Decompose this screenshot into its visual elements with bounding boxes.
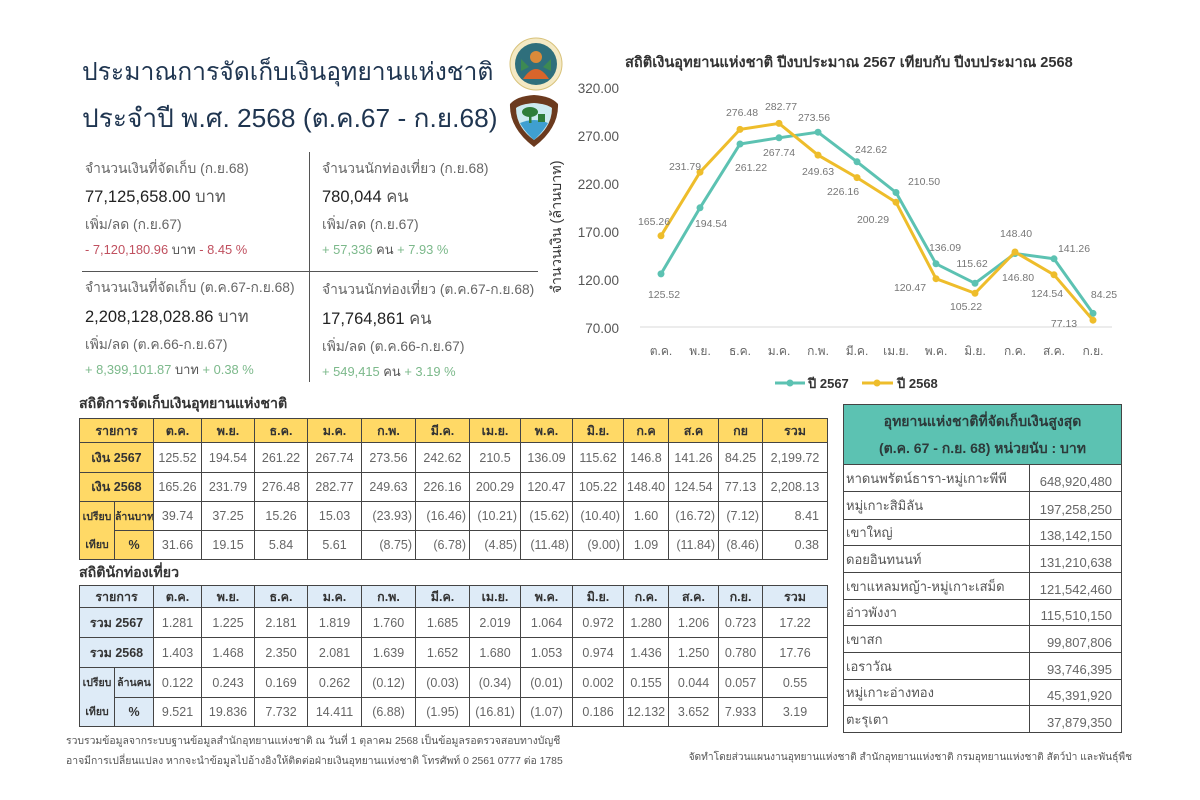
panel: monthly revenue summary bbox=[85, 159, 249, 257]
data labels: 194.54 bbox=[695, 218, 727, 230]
table: visitor statistics: 0.55 bbox=[783, 676, 807, 690]
data labels: 148.40 bbox=[1000, 228, 1032, 240]
data labels: 249.63 bbox=[802, 166, 834, 178]
table: visitor statistics: 2.181 bbox=[265, 616, 297, 630]
table: revenue statistics: (4.85) bbox=[484, 538, 517, 552]
table: visitor statistics: 0.243 bbox=[212, 676, 244, 690]
table: visitor statistics: 1.281 bbox=[162, 616, 193, 630]
table: revenue statistics: 124.54 bbox=[674, 480, 713, 494]
data labels: 146.80 bbox=[1002, 272, 1034, 284]
table: visitor statistics: 1.064 bbox=[531, 616, 562, 630]
icon: park shield bbox=[510, 95, 558, 147]
table: revenue statistics: ล้านบาท bbox=[115, 510, 154, 522]
table: visitor statistics: เปรียบ bbox=[83, 677, 111, 689]
divider: summary horizontal bbox=[82, 271, 538, 272]
table: revenue statistics: 200.29 bbox=[476, 480, 514, 494]
table: revenue statistics: (11.48) bbox=[530, 538, 569, 552]
table: revenue statistics: มี.ค. bbox=[431, 424, 454, 438]
table: visitor statistics: 7.933 bbox=[725, 705, 756, 719]
table: visitor statistics: 1.639 bbox=[373, 646, 404, 660]
y axis labels: 170.00 bbox=[578, 225, 619, 240]
x axis labels bbox=[650, 344, 1103, 358]
x axis labels: ส.ค. bbox=[1043, 344, 1065, 358]
table: top revenue parks: เอราวัณ bbox=[846, 658, 892, 674]
panel: yearly revenue summary: + 8,399,101.87 บาท + 0.38 % bbox=[85, 362, 254, 377]
table: top revenue parks: 45,391,920 bbox=[1047, 688, 1112, 703]
table: visitor statistics: 2.081 bbox=[319, 646, 350, 660]
table: visitor statistics bbox=[79, 585, 828, 727]
panel: yearly visitors summary bbox=[322, 280, 534, 379]
table: revenue statistics: เทียบ bbox=[85, 539, 109, 551]
table: visitor statistics: เทียบ bbox=[85, 706, 109, 718]
table: revenue statistics: 282.77 bbox=[315, 480, 354, 494]
table: revenue statistics: 273.56 bbox=[369, 450, 408, 464]
table: top revenue parks: 138,142,150 bbox=[1040, 528, 1112, 543]
data labels: 115.62 bbox=[956, 258, 988, 270]
table: top revenue parks bbox=[843, 404, 1122, 733]
panel: monthly revenue summary: - 7,120,180.96 บาท - 8.45 % bbox=[85, 242, 247, 257]
table: revenue statistics: 1.09 bbox=[634, 538, 658, 552]
panel: yearly visitors summary: จำนวนนักท่องเที่ยว (ต.ค.67-ก.ย.68) bbox=[322, 282, 534, 297]
table: visitor statistics: 0.169 bbox=[265, 676, 297, 690]
table: visitor statistics: 0.780 bbox=[725, 646, 756, 660]
data labels: 276.48 bbox=[726, 107, 758, 119]
table: revenue statistics: กย bbox=[733, 424, 748, 438]
table: visitor statistics: 2.019 bbox=[479, 616, 511, 630]
table: visitor statistics: (1.07) bbox=[530, 705, 563, 719]
table: visitor statistics: 0.974 bbox=[582, 646, 614, 660]
table: visitor statistics: ก.ค. bbox=[635, 590, 657, 604]
panel: yearly revenue summary: จำนวนเงินที่จัดเก็บ (ต.ค.67-ก.ย.68) bbox=[85, 280, 295, 295]
table: revenue statistics: % bbox=[128, 538, 140, 552]
panel: yearly revenue summary: เพิ่ม/ลด (ต.ค.66-ก.ย.67) bbox=[85, 337, 227, 352]
table: revenue statistics: 15.26 bbox=[265, 509, 297, 523]
panel: monthly visitors summary: จำนวนนักท่องเที่ยว (ก.ย.68) bbox=[322, 161, 488, 176]
heading: visitor table: สถิตินักท่องเที่ยว bbox=[79, 565, 179, 581]
table: revenue statistics: รวม bbox=[784, 424, 806, 438]
table: revenue statistics: 1.60 bbox=[634, 509, 658, 523]
credit: จัดทำโดยส่วนแผนงานอุทยานแห่งชาติ สำนักอุทยานแห่งชาติ กรมอุทยานแห่งชาติ สัตว์ป่า และพันธุ์พืช bbox=[689, 752, 1132, 763]
table: visitor statistics: 1.436 bbox=[630, 646, 662, 660]
table: revenue statistics: เงิน 2567 bbox=[91, 450, 142, 464]
table: visitor statistics: 1.468 bbox=[212, 646, 244, 660]
table: revenue statistics: 210.5 bbox=[479, 450, 511, 464]
panel: monthly revenue summary: จำนวนเงินที่จัดเก็บ (ก.ย.68) bbox=[85, 161, 249, 176]
data labels: 165.26 bbox=[638, 216, 670, 228]
title: ประมาณการจัดเก็บเงินอุทยานแห่งชาติ bbox=[82, 59, 493, 86]
x axis labels: ก.พ. bbox=[807, 344, 829, 358]
table: visitor statistics: ม.ค. bbox=[323, 590, 346, 604]
table: visitor statistics: 2.350 bbox=[265, 646, 297, 660]
table: revenue statistics: 136.09 bbox=[527, 450, 566, 464]
table: visitor statistics: 0.186 bbox=[582, 705, 614, 719]
table: visitor statistics: 19.836 bbox=[209, 705, 247, 719]
data labels bbox=[638, 101, 1117, 330]
data labels: 267.74 bbox=[763, 147, 795, 159]
table: revenue statistics: 146.8 bbox=[630, 450, 662, 464]
data labels: 77.13 bbox=[1051, 318, 1077, 330]
title bbox=[82, 57, 497, 133]
table: revenue statistics: 120.47 bbox=[527, 480, 566, 494]
table: visitor statistics: 1.685 bbox=[427, 616, 458, 630]
table: visitor statistics: 1.403 bbox=[162, 646, 193, 660]
y axis labels: 220.00 bbox=[578, 177, 619, 192]
x axis labels: ต.ค. bbox=[650, 344, 672, 358]
table: visitor statistics: ธ.ค. bbox=[270, 590, 292, 604]
x axis labels: มิ.ย. bbox=[964, 344, 986, 358]
table: top revenue parks: เขาแหลมหญ้า-หมู่เกาะเสม็ด bbox=[846, 578, 1005, 594]
table: top revenue parks: 99,807,806 bbox=[1047, 635, 1112, 650]
footnote: อาจมีการเปลี่ยนแปลง หากจะนำข้อมูลไปอ้างอิงให้ติดต่อฝ่ายเงินอุทยานแห่งชาติ โทรศัพท์ 0 2561 0777 ต่อ 1785 bbox=[66, 756, 563, 767]
data labels: 242.62 bbox=[855, 144, 887, 156]
table: revenue statistics: 19.15 bbox=[212, 538, 244, 552]
table: visitor statistics: 17.22 bbox=[779, 616, 811, 630]
table: visitor statistics: (0.03) bbox=[426, 676, 459, 690]
y axis labels: 120.00 bbox=[578, 273, 619, 288]
data labels: 231.79 bbox=[669, 161, 701, 173]
table: visitor statistics: (0.34) bbox=[479, 676, 511, 690]
table: revenue statistics: พ.ย. bbox=[217, 424, 239, 438]
x axis labels: ก.ค. bbox=[1004, 344, 1026, 358]
table: revenue statistics: (11.84) bbox=[676, 538, 715, 552]
table: visitor statistics: ต.ค. bbox=[166, 590, 189, 604]
table: revenue statistics: 31.66 bbox=[162, 538, 193, 552]
table: top revenue parks: หมู่เกาะสิมิลัน bbox=[846, 498, 923, 513]
x axis labels: เม.ย. bbox=[883, 344, 909, 358]
table: visitor statistics: 0.002 bbox=[582, 676, 614, 690]
table: revenue statistics bbox=[79, 418, 828, 560]
legend: ปี 2567 bbox=[807, 376, 849, 391]
series: 2567 bbox=[658, 129, 1096, 317]
table: revenue statistics: 276.48 bbox=[262, 480, 300, 494]
panel: yearly visitors summary: 17,764,861 คน bbox=[322, 310, 432, 328]
data labels: 105.22 bbox=[950, 301, 982, 313]
table: revenue statistics: 84.25 bbox=[725, 450, 756, 464]
table: visitor statistics: พ.ค. bbox=[535, 590, 558, 604]
table: revenue statistics: (8.75) bbox=[379, 538, 412, 552]
data labels: 84.25 bbox=[1091, 289, 1117, 301]
panel: yearly visitors summary: + 549,415 คน + 3.19 % bbox=[322, 364, 456, 379]
table: visitor statistics: 0.044 bbox=[678, 676, 709, 690]
table: revenue statistics: 125.52 bbox=[158, 450, 197, 464]
table: revenue statistics: 105.22 bbox=[579, 480, 617, 494]
table: revenue statistics: ส.ค bbox=[684, 424, 703, 438]
data labels: 200.29 bbox=[857, 214, 889, 226]
table: revenue statistics: ธ.ค. bbox=[270, 424, 292, 438]
panel: monthly revenue summary: 77,125,658.00 บาท bbox=[85, 188, 226, 206]
table: revenue statistics: 148.40 bbox=[627, 480, 665, 494]
table: revenue statistics: รายการ bbox=[95, 424, 138, 438]
table: visitor statistics: 1.760 bbox=[373, 616, 404, 630]
y axis labels bbox=[578, 81, 619, 336]
data labels: 125.52 bbox=[648, 289, 680, 301]
table: revenue statistics: เงิน 2568 bbox=[91, 480, 142, 494]
table: revenue statistics: 261.22 bbox=[262, 450, 300, 464]
table: visitor statistics: (1.95) bbox=[426, 705, 459, 719]
table: revenue statistics: เปรียบ bbox=[83, 511, 111, 523]
table: revenue statistics: 77.13 bbox=[725, 480, 756, 494]
table: visitor statistics: 1.206 bbox=[678, 616, 709, 630]
panel: monthly visitors summary: 780,044 คน bbox=[322, 188, 409, 206]
table: visitor statistics: 0.972 bbox=[582, 616, 614, 630]
table: visitor statistics: ก.พ. bbox=[377, 590, 400, 604]
table: revenue statistics: 231.79 bbox=[209, 480, 247, 494]
table: revenue statistics: 39.74 bbox=[162, 509, 193, 523]
table: visitor statistics: รวม 2568 bbox=[90, 646, 143, 660]
table: revenue statistics: เม.ย. bbox=[482, 424, 508, 438]
legend: ปี 2568 bbox=[896, 376, 938, 391]
data labels: 282.77 bbox=[765, 101, 797, 113]
series: 2568 bbox=[658, 120, 1096, 324]
table: top revenue parks: 131,210,638 bbox=[1040, 555, 1112, 570]
table: visitor statistics: 0.155 bbox=[630, 676, 662, 690]
x axis labels: มี.ค. bbox=[846, 344, 868, 358]
table: revenue statistics: 115.62 bbox=[579, 450, 617, 464]
table: visitor statistics: (6.88) bbox=[372, 705, 405, 719]
panel: yearly visitors summary: เพิ่ม/ลด (ต.ค.66-ก.ย.67) bbox=[322, 339, 464, 354]
table: visitor statistics: 3.19 bbox=[783, 705, 807, 719]
table: revenue statistics: 249.63 bbox=[369, 480, 408, 494]
table: revenue statistics: 0.38 bbox=[795, 538, 819, 552]
table: visitor statistics: รวม bbox=[784, 590, 806, 604]
panel: monthly revenue summary: เพิ่ม/ลด (ก.ย.67) bbox=[85, 217, 182, 232]
panel: monthly visitors summary: เพิ่ม/ลด (ก.ย.67) bbox=[322, 217, 419, 232]
table: top revenue parks: (ต.ค. 67 - ก.ย. 68) หน่วยนับ : บาท bbox=[879, 440, 1086, 456]
table: revenue statistics: (10.21) bbox=[477, 509, 517, 523]
table: top revenue parks: 37,879,350 bbox=[1047, 715, 1112, 730]
table: top revenue parks: เขาสก bbox=[846, 632, 882, 646]
table: revenue statistics: 194.54 bbox=[209, 450, 247, 464]
table: top revenue parks: 93,746,395 bbox=[1047, 662, 1112, 677]
table: revenue statistics: ก.ค bbox=[636, 424, 656, 438]
table: visitor statistics: 1.652 bbox=[427, 646, 458, 660]
table: revenue statistics: 2,199.72 bbox=[771, 450, 819, 464]
table: top revenue parks: 121,542,460 bbox=[1040, 582, 1112, 597]
table: visitor statistics: ส.ค. bbox=[682, 590, 705, 604]
x axis labels: พ.ค. bbox=[925, 344, 947, 358]
table: visitor statistics: 14.411 bbox=[316, 705, 353, 719]
table: revenue statistics: (15.62) bbox=[529, 509, 569, 523]
data labels: 261.22 bbox=[735, 162, 767, 174]
table: revenue statistics: (10.40) bbox=[580, 509, 620, 523]
table: visitor statistics: 0.723 bbox=[725, 616, 756, 630]
table: visitor statistics: 12.132 bbox=[627, 705, 665, 719]
panel: yearly revenue summary: 2,208,128,028.86 บาท bbox=[85, 308, 249, 326]
table: revenue statistics: ก.พ. bbox=[377, 424, 400, 438]
table: visitor statistics: (16.81) bbox=[475, 705, 515, 719]
x axis labels: พ.ย. bbox=[689, 344, 711, 358]
table: top revenue parks: ตะรุเตา bbox=[846, 712, 889, 726]
chart title: สถิติเงินอุทยานแห่งชาติ ปีงบประมาณ 2567 เทียบกับ ปีงบประมาณ 2568 bbox=[625, 54, 1073, 71]
panel: yearly revenue summary bbox=[85, 278, 295, 377]
table: top revenue parks: ดอยอินทนนท์ bbox=[846, 552, 921, 566]
y axis labels: 70.00 bbox=[585, 321, 619, 336]
panel: monthly visitors summary bbox=[322, 159, 488, 257]
table: revenue statistics: (16.46) bbox=[426, 509, 466, 523]
line chart bbox=[549, 54, 1117, 391]
table: visitor statistics: ล้านคน bbox=[117, 677, 151, 689]
table: revenue statistics: 242.62 bbox=[423, 450, 462, 464]
table: visitor statistics: เม.ย. bbox=[482, 590, 508, 604]
legend bbox=[775, 376, 938, 391]
table: revenue statistics: (16.72) bbox=[675, 509, 715, 523]
y axis labels: 320.00 bbox=[578, 81, 619, 96]
table: revenue statistics: มิ.ย. bbox=[587, 424, 609, 438]
table: visitor statistics: % bbox=[128, 705, 140, 719]
table: top revenue parks: อุทยานแห่งชาติที่จัดเก็บเงินสูงสุด bbox=[884, 412, 1081, 428]
table: revenue statistics: 5.61 bbox=[322, 538, 347, 552]
table: top revenue parks: อ่าวพังงา bbox=[846, 605, 897, 620]
table: top revenue parks: 115,510,150 bbox=[1041, 608, 1112, 623]
table: revenue statistics: ม.ค. bbox=[323, 424, 346, 438]
table: revenue statistics: 15.03 bbox=[319, 509, 350, 523]
table: revenue statistics: 5.84 bbox=[269, 538, 293, 552]
heading: revenue table: สถิติการจัดเก็บเงินอุทยานแห่งชาติ bbox=[79, 396, 287, 412]
table: revenue statistics: 8.41 bbox=[795, 509, 819, 523]
table: visitor statistics: รวม 2567 bbox=[90, 616, 143, 630]
table: revenue statistics: ต.ค. bbox=[166, 424, 189, 438]
data labels: 120.47 bbox=[894, 282, 926, 294]
table: revenue statistics: 226.16 bbox=[423, 480, 462, 494]
table: revenue statistics: (6.78) bbox=[433, 538, 466, 552]
table: visitor statistics: 1.053 bbox=[531, 646, 562, 660]
table: visitor statistics: 1.225 bbox=[212, 616, 244, 630]
data labels: 124.54 bbox=[1031, 288, 1063, 300]
icon: department seal bbox=[510, 38, 562, 90]
title: ประจำปี พ.ศ. 2568 (ต.ค.67 - ก.ย.68) bbox=[82, 103, 497, 133]
table: visitor statistics: 1.680 bbox=[479, 646, 511, 660]
x axis labels: ก.ย. bbox=[1083, 344, 1103, 358]
footnote bbox=[66, 734, 563, 767]
data labels: 273.56 bbox=[798, 112, 830, 124]
table: visitor statistics: 17.76 bbox=[779, 646, 811, 660]
table: top revenue parks: หาดนพรัตน์ธารา-หมู่เกาะพีพี bbox=[846, 470, 1007, 486]
data labels: 141.26 bbox=[1058, 243, 1090, 255]
footnote: รวบรวมข้อมูลจากระบบฐานข้อมูลสำนักอุทยานแห่งชาติ ณ วันที่ 1 ตุลาคม 2568 เป็นข้อมูลรอตรวจสอบทางบัญชี bbox=[66, 736, 560, 747]
table: revenue statistics: (7.12) bbox=[726, 509, 759, 523]
table: revenue statistics: พ.ค. bbox=[535, 424, 558, 438]
table: top revenue parks: หมู่เกาะอ่างทอง bbox=[846, 685, 934, 700]
table: revenue statistics: (9.00) bbox=[587, 538, 620, 552]
data labels: 226.16 bbox=[827, 186, 859, 198]
table: visitor statistics: 1.819 bbox=[319, 616, 350, 630]
table: visitor statistics: 0.057 bbox=[725, 676, 756, 690]
table: visitor statistics: (0.01) bbox=[530, 676, 563, 690]
table: visitor statistics: 7.732 bbox=[265, 705, 297, 719]
divider: summary cross bbox=[309, 152, 310, 382]
panel: monthly visitors summary: + 57,336 คน + 7.93 % bbox=[322, 242, 448, 257]
table: revenue statistics: 267.74 bbox=[315, 450, 354, 464]
table: visitor statistics: (0.12) bbox=[372, 676, 405, 690]
table: revenue statistics: 2,208.13 bbox=[771, 480, 819, 494]
table: revenue statistics: (23.93) bbox=[372, 509, 412, 523]
table: visitor statistics: 3.652 bbox=[678, 705, 709, 719]
table: visitor statistics: ก.ย. bbox=[730, 590, 751, 604]
table: visitor statistics: พ.ย. bbox=[217, 590, 239, 604]
table: visitor statistics: มิ.ย. bbox=[587, 590, 609, 604]
y axis title: จำนวนเงิน (ล้านบาท) bbox=[549, 160, 565, 294]
table: visitor statistics: 1.250 bbox=[678, 646, 709, 660]
table: revenue statistics: 37.25 bbox=[212, 509, 244, 523]
table: visitor statistics: รายการ bbox=[95, 590, 138, 604]
table: visitor statistics: 1.280 bbox=[630, 616, 662, 630]
table: top revenue parks: เขาใหญ่ bbox=[846, 525, 893, 540]
table: visitor statistics: 0.262 bbox=[319, 676, 350, 690]
table: revenue statistics: 165.26 bbox=[158, 480, 197, 494]
table: visitor statistics: มี.ค. bbox=[431, 590, 454, 604]
x axis labels: ม.ค. bbox=[768, 344, 790, 358]
data labels: 136.09 bbox=[929, 242, 961, 254]
x axis labels: ธ.ค. bbox=[729, 344, 751, 358]
table: top revenue parks: 648,920,480 bbox=[1040, 474, 1112, 489]
table: revenue statistics: (8.46) bbox=[726, 538, 759, 552]
data labels: 210.50 bbox=[908, 176, 940, 188]
table: revenue statistics: 141.26 bbox=[674, 450, 713, 464]
table: visitor statistics: 9.521 bbox=[162, 705, 193, 719]
table: visitor statistics: 0.122 bbox=[162, 676, 193, 690]
table: top revenue parks: 197,258,250 bbox=[1040, 502, 1112, 517]
y axis labels: 270.00 bbox=[578, 129, 619, 144]
